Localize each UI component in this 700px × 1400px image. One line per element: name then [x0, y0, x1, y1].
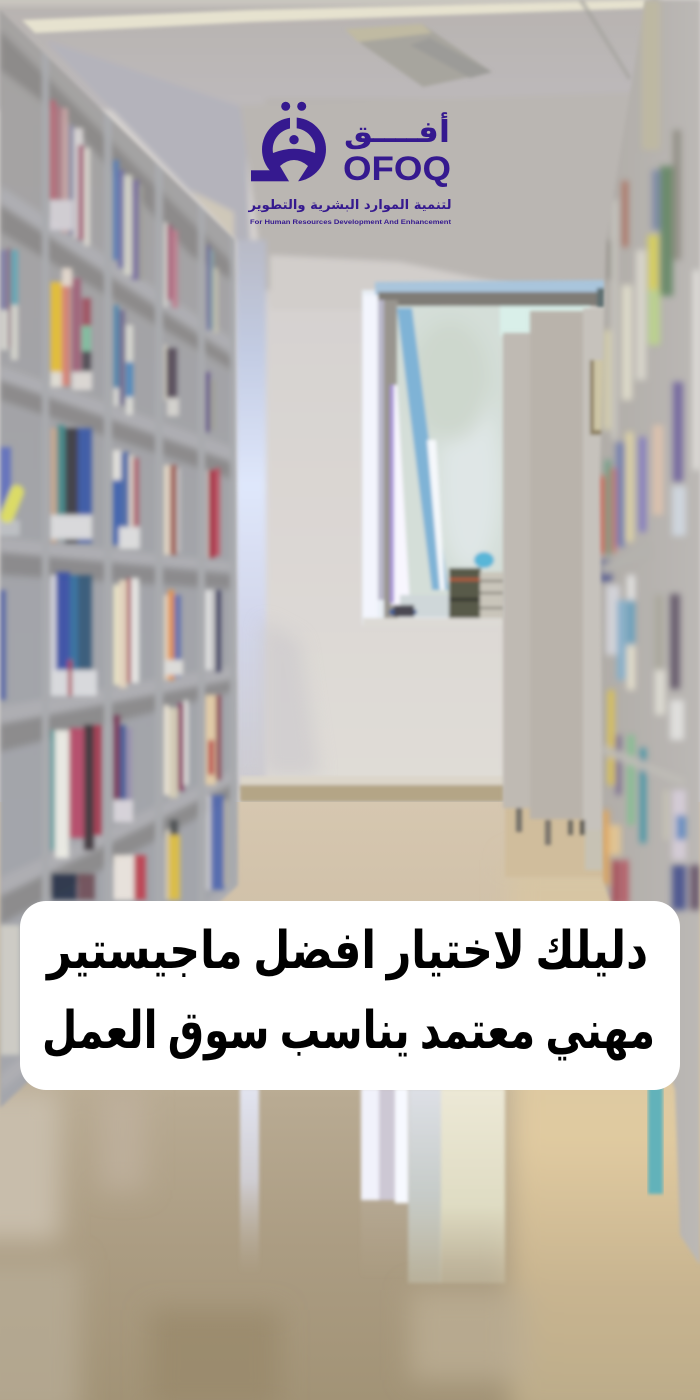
logo english tagline: For Human Resources Development And Enhancement [250, 219, 452, 226]
book rows [0, 100, 228, 1055]
shelf shadows [0, 30, 240, 925]
logo latin name: OFOQ [343, 150, 451, 188]
title card [20, 901, 680, 1090]
teal book reflection on the floor [648, 1086, 663, 1194]
right bookcase with books [595, 0, 700, 1300]
ceiling and walls [0, 0, 700, 810]
logo arabic tagline: لتنمية الموارد البشرية والتطوير [247, 198, 452, 213]
floor [0, 802, 700, 1400]
soft shadow on the wall corner [262, 620, 320, 776]
logo arabic name: أفــــق [344, 112, 450, 150]
skirting board [240, 776, 505, 802]
logo: OFOQ [245, 100, 452, 226]
floor reflections [240, 1088, 505, 1283]
window [362, 280, 605, 627]
shelves [0, 186, 240, 1092]
left bookcase [0, 0, 240, 1120]
ceiling light strip and lamp [22, 0, 645, 87]
uprights [40, 56, 238, 901]
logo mark [251, 102, 326, 182]
end panels of shelves [503, 308, 610, 870]
